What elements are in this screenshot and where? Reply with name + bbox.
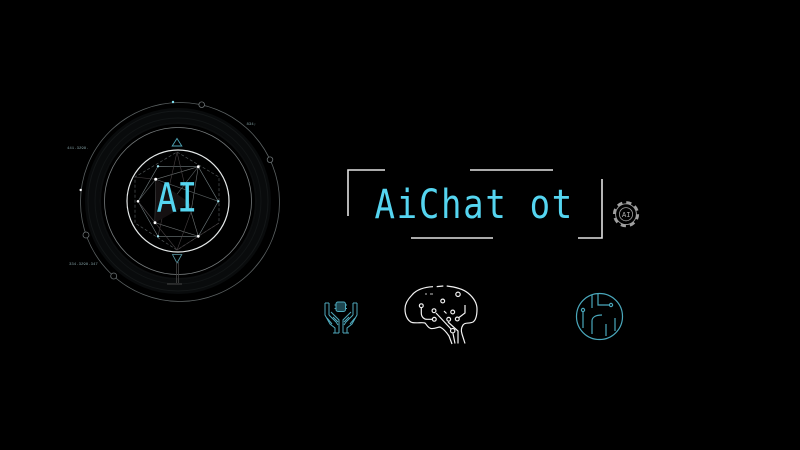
- AI label: AI: [156, 175, 197, 221]
- network polygon: [135, 152, 219, 250]
- icon: AI gear: AI: [622, 212, 630, 220]
- inner white ring: [127, 150, 229, 252]
- icon: circuit circle: [576, 294, 622, 340]
- right hand: [343, 303, 357, 333]
- chip: [334, 302, 347, 312]
- small coordinate labels: [67, 123, 256, 267]
- small coordinate labels: 441.3298.: [67, 147, 89, 151]
- ring nodes: [80, 101, 273, 279]
- middle ring: [104, 128, 252, 274]
- title text: AiChat ot: [374, 181, 574, 228]
- circuit nodes: [456, 292, 460, 296]
- small coordinate labels: 334.3298.347: [69, 263, 98, 267]
- small coordinate labels: 834;: [246, 123, 256, 127]
- circuit traces: [421, 305, 465, 344]
- network nodes: [137, 165, 220, 238]
- dashed hexagon: [135, 152, 219, 250]
- icon: brain circuit: [405, 286, 477, 344]
- down triangle with stem: [167, 254, 182, 284]
- icon: AI gear: [614, 203, 638, 226]
- radar emblem: AI core: [67, 101, 280, 302]
- icon: hands holding chip: [325, 302, 357, 333]
- left hand: [325, 303, 339, 333]
- title frame: [348, 170, 602, 238]
- up triangle: [172, 138, 182, 146]
- outer ring: [80, 102, 280, 302]
- brain outline: [405, 287, 452, 344]
